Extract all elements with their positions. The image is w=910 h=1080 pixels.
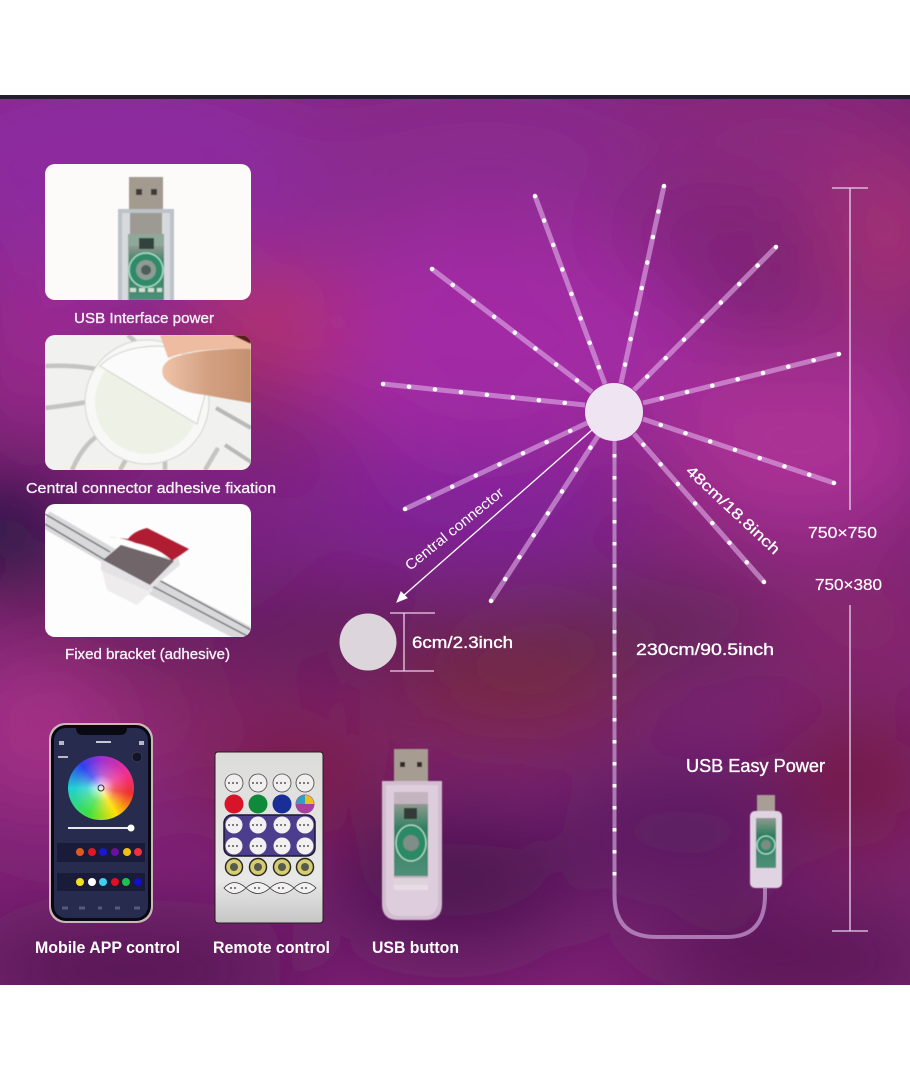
icon: USB button [382,749,442,920]
color wheel [68,756,134,820]
chart: starburst light dimensions [383,186,839,937]
label: fixed bracket: Fixed bracket (adhesive) [65,646,230,663]
dimension line: height [832,188,868,931]
tail wire with USB cable [614,440,765,937]
light rays [383,186,839,601]
icon: mobile phone app [49,723,153,923]
label: ray length: 48cm/18.8inch [682,462,783,558]
panel: USB interface power photo [45,164,251,304]
central hub [585,383,643,441]
connector size diagram [340,613,513,671]
label: tail length: 230cm/90.5inch [636,640,774,659]
icon: USB easy power plug [750,795,782,888]
label: 750x750: 750×750 [808,525,877,542]
icon: USB plug [118,177,174,304]
label: Mobile APP control: Mobile APP control [35,938,180,957]
label: Remote control: Remote control [213,938,330,957]
label: USB Easy Power: USB Easy Power [686,756,825,776]
label: USB button: USB button [372,938,459,957]
arrow: central connector: Central connector [402,485,507,574]
arrow: central connector [397,430,592,602]
icon: remote control [215,752,323,923]
icon: fingers [160,335,251,403]
icon: bracket [101,528,189,605]
panel: central connector adhesive photo [45,335,251,470]
label: USB Interface power: USB Interface power [74,310,214,327]
panel: fixed bracket photo [45,504,251,638]
label: central connector adhesive fixation: Central connector adhesive fixation [26,480,276,497]
connector size diagram: 6cm/2.3inch [412,633,513,652]
label: 750x380: 750×380 [815,577,882,594]
